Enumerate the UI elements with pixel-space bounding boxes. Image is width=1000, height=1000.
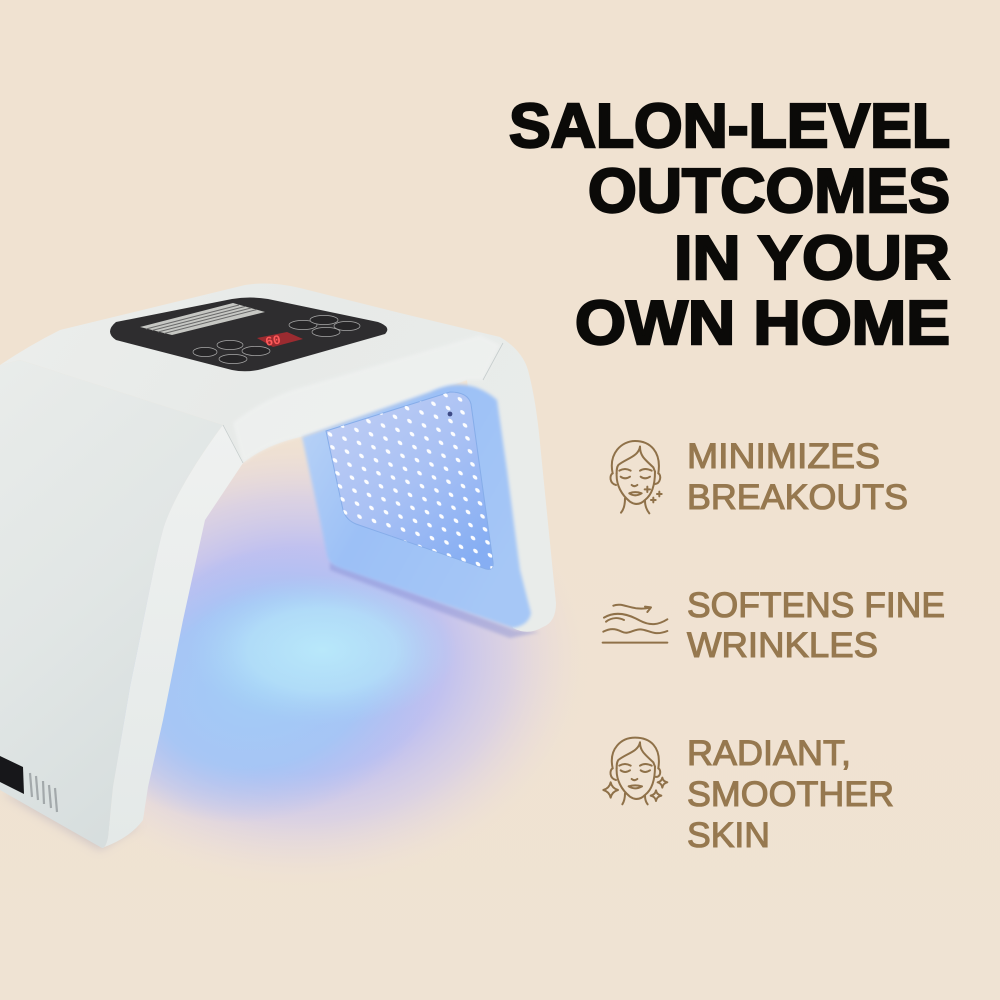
label: SMOOTHER — [687, 775, 894, 814]
left leg front face — [0, 360, 223, 848]
label: SOFTENS FINE — [687, 586, 945, 625]
label — [687, 734, 894, 855]
benefit: softens fine wrinkles — [603, 586, 945, 665]
right leg blue inner frame — [302, 385, 531, 628]
strip highlight — [233, 335, 500, 463]
red LED display — [257, 332, 303, 350]
power socket — [0, 756, 24, 794]
left leg inner edge — [102, 425, 243, 848]
label — [687, 437, 908, 517]
vent grille — [140, 303, 265, 335]
product: LED light therapy device — [0, 284, 556, 850]
label: RADIANT, — [687, 734, 851, 773]
contact shadow under device — [0, 792, 140, 850]
sensor dot — [448, 412, 452, 416]
title: SALON-LEVEL — [509, 92, 950, 161]
side vents — [30, 773, 57, 812]
label — [687, 586, 945, 665]
blue light glow on floor — [10, 435, 590, 885]
control panel — [110, 298, 387, 371]
benefit: minimizes breakouts — [610, 437, 908, 517]
seam lines — [223, 343, 503, 463]
title: IN YOUR — [674, 224, 950, 293]
benefit: radiant, smoother skin — [603, 734, 894, 855]
label: MINIMIZES — [687, 437, 880, 476]
red LED display: 60 — [264, 332, 282, 350]
label: BREAKOUTS — [687, 478, 908, 517]
label: WRINKLES — [687, 626, 878, 665]
right foot shadow — [330, 562, 540, 638]
icon: face with blemishes — [610, 441, 662, 513]
buttons left cluster — [193, 340, 270, 364]
device top surface and right rim — [0, 284, 556, 632]
icon: waves — [603, 605, 667, 643]
icon: face with sparkles — [603, 738, 667, 804]
LED dots — [326, 392, 493, 569]
LED panel — [326, 392, 493, 569]
title — [509, 92, 950, 358]
title: OUTCOMES — [588, 157, 950, 226]
title: OWN HOME — [575, 289, 950, 358]
label: SKIN — [687, 816, 770, 855]
buttons right cluster — [289, 315, 360, 337]
